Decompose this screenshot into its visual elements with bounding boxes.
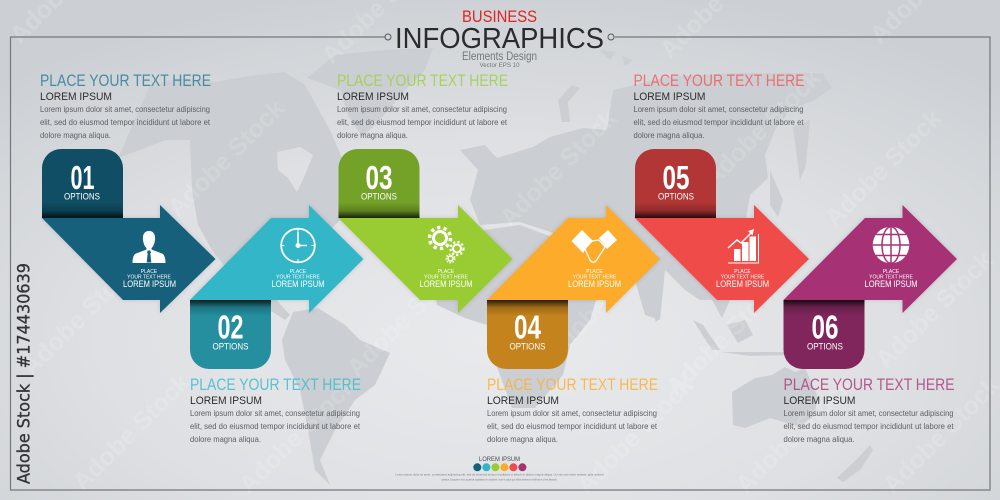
icon: globe	[873, 227, 909, 263]
stock id: Adobe Stock | #174430639	[14, 263, 34, 484]
arrow 03	[338, 205, 512, 313]
step 04	[487, 205, 660, 369]
legend: Lorem ipsum dolor sit amet, consectetur adipiscing elit, sed do eiusmod tempor incididunt ut labore et dolore magna aliqua. Ut enim ad minim veniam, quis nostrud	[396, 472, 604, 476]
text block 02: PLACE YOUR TEXT HERE	[190, 376, 361, 394]
arrow 01	[42, 205, 216, 313]
step 02	[190, 205, 364, 369]
watermarks: Adobe Stock	[730, 371, 858, 499]
watermarks: Adobe Stock	[539, 238, 667, 366]
tab 06	[784, 300, 864, 369]
text block 03	[337, 72, 508, 140]
tab 06: OPTIONS	[807, 342, 843, 352]
tab 03: 03	[366, 159, 392, 196]
step 06	[784, 205, 957, 369]
text block 04: PLACE YOUR TEXT HERE	[487, 376, 658, 394]
title: INFOGRAPHICS	[395, 23, 604, 55]
legend: pariatur. Excepteur sint occaecat cupidatat non proident, sunt in culpa qui officia deserunt mollit anim id est laborum.	[442, 478, 558, 482]
label 05: YOUR TEXT HERE	[721, 274, 765, 280]
arrow 06	[784, 205, 957, 313]
text block 01	[40, 72, 211, 140]
tab 01: OPTIONS	[64, 192, 100, 202]
label 06: LOREM IPSUM	[864, 278, 918, 289]
label 04: LOREM IPSUM	[568, 278, 621, 289]
text block 06	[784, 376, 954, 444]
label 06	[864, 269, 918, 289]
text block 02: elit, sed do eiusmod tempor incididunt ut labore et	[190, 421, 361, 431]
label 02: PLACE	[290, 269, 307, 275]
text block 01: dolore magna aliqua.	[40, 130, 111, 140]
text block 06: PLACE YOUR TEXT HERE	[784, 376, 954, 394]
legend	[396, 456, 604, 482]
label 02: YOUR TEXT HERE	[276, 274, 321, 280]
step 03	[338, 149, 512, 313]
text block 04: dolore magna aliqua.	[487, 434, 558, 444]
label 03: PLACE	[438, 269, 455, 275]
watermarks: Adobe Stock	[494, 104, 622, 232]
tab 02	[190, 300, 271, 369]
label 04	[568, 269, 621, 289]
text block 06: dolore magna aliqua.	[784, 434, 854, 444]
text block 01: Lorem ipsum dolor sit amet, consectetur adipiscing	[40, 104, 210, 114]
watermarks: Adobe Stock	[819, 104, 947, 232]
tab 04	[487, 300, 568, 369]
text block 05: elit, sed do eiusmod tempor incididunt ut labore et	[634, 117, 804, 127]
title: Vector EPS 10	[480, 63, 520, 69]
label 03	[420, 269, 473, 289]
step 01	[42, 149, 216, 313]
tab 05: 05	[662, 159, 690, 196]
tab 06: 06	[812, 308, 838, 346]
watermarks: Adobe Stock	[870, 246, 998, 374]
icon: growth chart	[728, 229, 759, 264]
watermarks: Adobe Stock	[698, 64, 826, 192]
label 05: LOREM IPSUM	[716, 278, 769, 289]
text block 02: dolore magna aliqua.	[190, 434, 261, 444]
arrow 02	[190, 205, 364, 313]
watermarks: Adobe Stock	[660, 273, 788, 401]
text block 05: Lorem ipsum dolor sit amet, consectetur adipiscing	[634, 104, 804, 114]
tab 04: OPTIONS	[510, 342, 546, 352]
text block 02	[190, 376, 361, 444]
text block 05: PLACE YOUR TEXT HERE	[634, 72, 804, 90]
watermarks: Adobe Stock	[571, 371, 699, 499]
text block 01: LOREM IPSUM	[40, 91, 112, 103]
icon: clock	[281, 229, 315, 262]
label 01	[123, 269, 176, 289]
label 01: YOUR TEXT HERE	[127, 274, 172, 280]
text block 02: LOREM IPSUM	[190, 395, 262, 407]
watermarks: Adobe Stock	[16, 253, 144, 381]
icon: handshake	[572, 230, 617, 262]
text block 06: Lorem ipsum dolor sit amet, consectetur adipiscing	[784, 408, 954, 418]
arrow 05	[635, 205, 809, 313]
text block 04: LOREM IPSUM	[487, 395, 559, 407]
icon: gears	[430, 228, 464, 263]
legend: LOREM IPSUM	[479, 456, 520, 463]
text block 05: LOREM IPSUM	[634, 91, 706, 103]
tab 02: 02	[218, 308, 244, 346]
label 02: LOREM IPSUM	[272, 278, 325, 289]
label 04: PLACE	[586, 269, 603, 275]
text block 03: Lorem ipsum dolor sit amet, consectetur adipiscing	[337, 104, 507, 114]
label 01: LOREM IPSUM	[123, 278, 176, 289]
text block 05	[634, 72, 804, 140]
label 02	[272, 269, 325, 289]
tab 05: OPTIONS	[658, 192, 694, 202]
label 06: PLACE	[883, 269, 900, 275]
step 05	[635, 149, 809, 313]
icon: businessman	[132, 231, 166, 263]
tab 01	[42, 149, 123, 218]
title: Elements Design	[462, 51, 537, 63]
tab 03	[338, 149, 420, 218]
title: BUSINESS	[462, 8, 537, 26]
arrow 04	[487, 205, 660, 313]
label 03: YOUR TEXT HERE	[424, 274, 469, 280]
label 05: PLACE	[734, 269, 751, 275]
text block 05: dolore magna aliqua.	[634, 130, 704, 140]
text block 04: Lorem ipsum dolor sit amet, consectetur adipiscing	[487, 408, 657, 418]
label 01: PLACE	[141, 269, 158, 275]
tab 05	[635, 149, 716, 218]
tab 01: 01	[70, 159, 94, 196]
text block 03: PLACE YOUR TEXT HERE	[337, 72, 508, 90]
label 05	[716, 269, 769, 289]
label 06: YOUR TEXT HERE	[869, 274, 914, 280]
text block 03: elit, sed do eiusmod tempor incididunt ut labore et	[337, 117, 508, 127]
world map	[118, 48, 873, 485]
watermarks: Adobe Stock	[162, 94, 290, 222]
title	[385, 8, 614, 69]
label 04: YOUR TEXT HERE	[573, 274, 617, 280]
text block 04: elit, sed do eiusmod tempor incididunt ut labore et	[487, 421, 658, 431]
watermarks: Adobe Stock	[341, 254, 469, 382]
tab 02: OPTIONS	[212, 342, 248, 352]
text block 06: elit, sed do eiusmod tempor incididunt ut labore et	[784, 421, 954, 431]
watermarks: Adobe Stock	[67, 368, 195, 496]
watermarks: Adobe Stock	[233, 371, 361, 499]
text block 03: dolore magna aliqua.	[337, 130, 408, 140]
tab 03: OPTIONS	[361, 192, 397, 202]
text block 01: PLACE YOUR TEXT HERE	[40, 72, 211, 90]
text block 03: LOREM IPSUM	[337, 91, 409, 103]
label 03: LOREM IPSUM	[420, 278, 473, 289]
tab 04: 04	[514, 308, 541, 346]
text block 01: elit, sed do eiusmod tempor incididunt ut labore et	[40, 117, 211, 127]
text block 02: Lorem ipsum dolor sit amet, consectetur adipiscing	[190, 408, 360, 418]
text block 04	[487, 376, 658, 444]
text block 06: LOREM IPSUM	[784, 395, 856, 407]
